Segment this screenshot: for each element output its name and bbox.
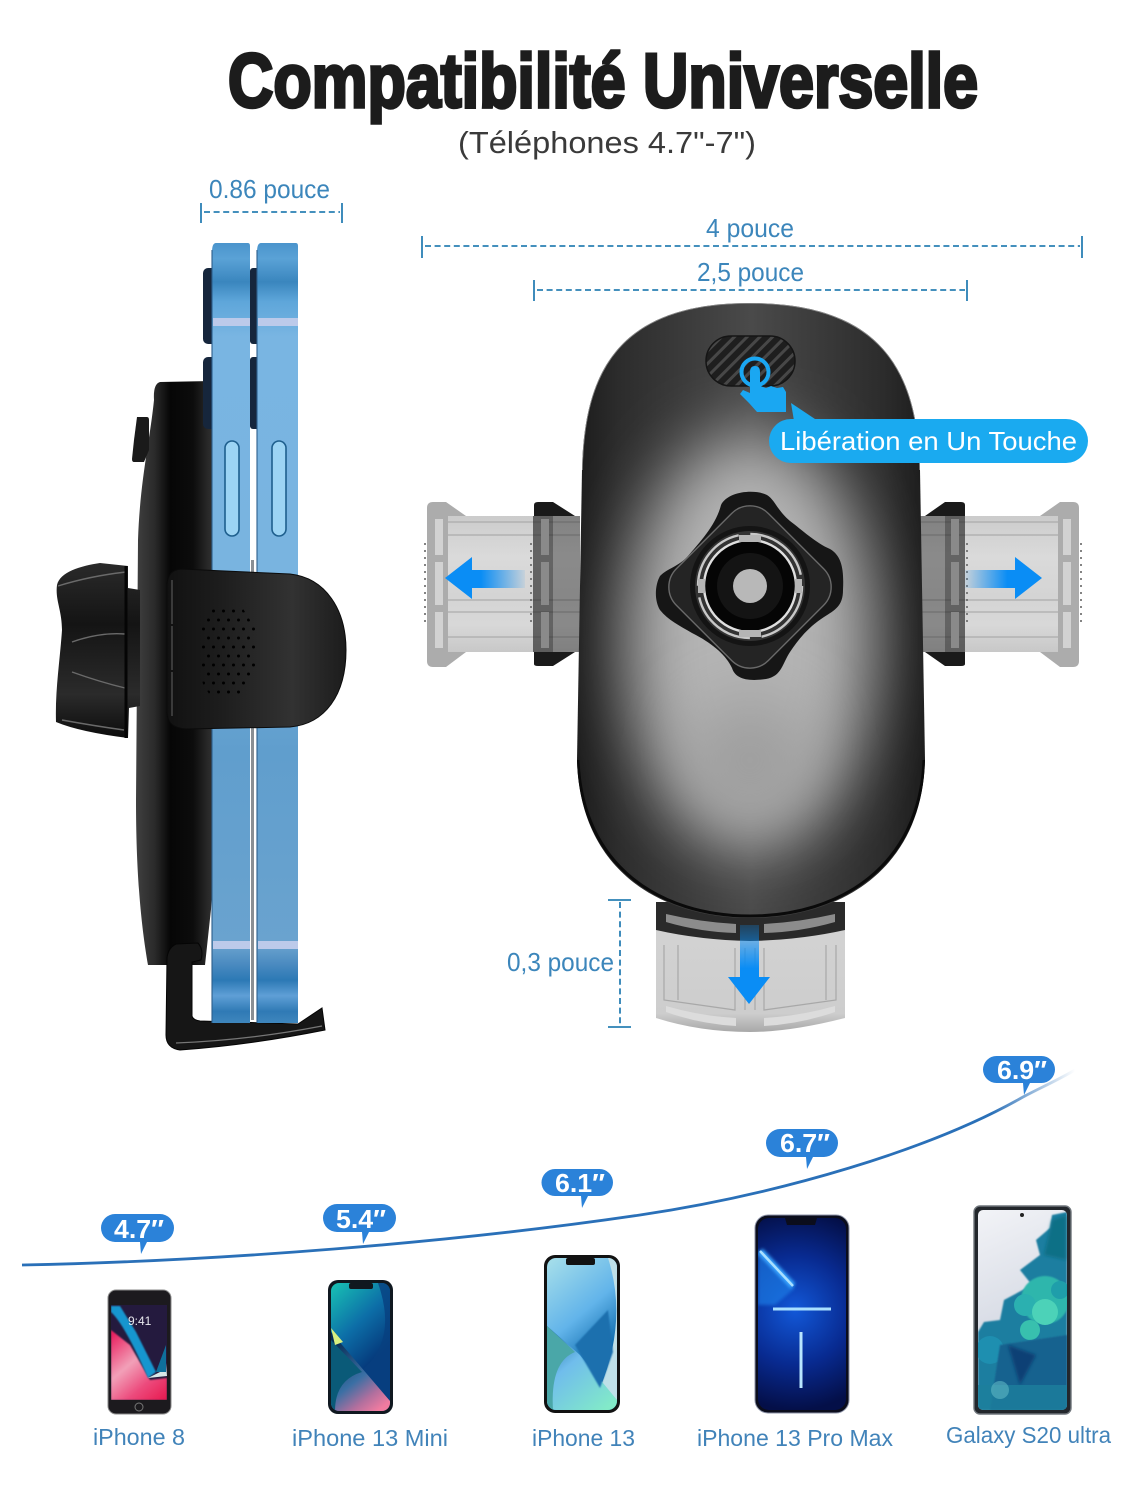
back phone bbox=[212, 243, 250, 1023]
callout: one-touch release bbox=[769, 403, 1088, 463]
size bubble 5.4: 5.4″ bbox=[336, 1204, 386, 1234]
size curve bbox=[22, 1070, 1075, 1265]
dimension: 0,3 pouce: 0,3 pouce bbox=[507, 947, 614, 977]
front phone bbox=[257, 243, 298, 1023]
phone: iPhone 13 Pro Max bbox=[755, 1215, 849, 1413]
size bubble 5.4 bbox=[323, 1204, 396, 1244]
size bubble 6.7 bbox=[766, 1128, 838, 1169]
release button bbox=[706, 336, 795, 386]
phone: iPhone 13 Mini bbox=[328, 1280, 393, 1414]
size bubble 4.7: 4.7″ bbox=[114, 1214, 164, 1244]
dimension: 0,3 pouce bbox=[507, 900, 631, 1027]
front view: holder bbox=[425, 303, 1088, 1032]
icon: touch hand bbox=[740, 358, 786, 412]
dimension: 2,5 pouce: 2,5 pouce bbox=[697, 257, 804, 287]
size bubble 6.9 bbox=[983, 1055, 1055, 1095]
side clamp arm bbox=[167, 569, 346, 729]
callout: one-touch release: Libération en Un Touche bbox=[780, 426, 1077, 456]
subtitle: (Téléphones 4.7"-7") bbox=[458, 125, 756, 160]
label: iPhone 8: iPhone 8 bbox=[93, 1424, 185, 1450]
size bubble 4.7 bbox=[101, 1214, 174, 1254]
arrow: right bbox=[965, 557, 1042, 599]
left extending arm bbox=[425, 502, 580, 667]
phone: iPhone 8: 9:41 bbox=[128, 1314, 152, 1328]
dimension: 2,5 pouce bbox=[534, 257, 967, 301]
phone: iPhone 8 bbox=[108, 1290, 171, 1414]
size bubble 6.1 bbox=[542, 1168, 613, 1208]
bottom hook bbox=[166, 943, 325, 1050]
right extending arm bbox=[920, 502, 1081, 667]
dimension: 4 pouce bbox=[422, 213, 1082, 258]
arrow: down bbox=[728, 925, 770, 1004]
phone side buttons bbox=[225, 441, 239, 536]
size bubble 6.9: 6.9″ bbox=[997, 1055, 1047, 1085]
phone camera bumps bbox=[203, 268, 217, 344]
bottom extending foot bbox=[656, 902, 845, 1032]
label: Galaxy S20 ultra: Galaxy S20 ultra bbox=[946, 1422, 1111, 1448]
release button side bbox=[132, 417, 149, 462]
label: iPhone 13 Mini: iPhone 13 Mini bbox=[292, 1425, 448, 1451]
center ball mount bbox=[656, 492, 843, 680]
phone: iPhone 13 bbox=[544, 1255, 620, 1413]
label: iPhone 13 Pro Max: iPhone 13 Pro Max bbox=[697, 1425, 893, 1451]
dimension: 0.86 pouce bbox=[201, 174, 342, 223]
dimension: 0.86 pouce: 0.86 pouce bbox=[209, 174, 330, 204]
side view: holder with two phones bbox=[56, 243, 346, 1050]
adjustment knob bbox=[56, 563, 140, 738]
arrow: left bbox=[445, 557, 525, 599]
size bubble 6.1: 6.1″ bbox=[555, 1168, 605, 1198]
main shell bbox=[577, 303, 925, 918]
dimension: 4 pouce: 4 pouce bbox=[706, 213, 794, 243]
phone: Galaxy S20 ultra bbox=[974, 1206, 1071, 1414]
title: Compatibilité Universelle bbox=[228, 39, 978, 124]
label: iPhone 13: iPhone 13 bbox=[532, 1425, 635, 1451]
size bubble 6.7: 6.7″ bbox=[780, 1128, 830, 1158]
holder body side bbox=[136, 381, 212, 965]
